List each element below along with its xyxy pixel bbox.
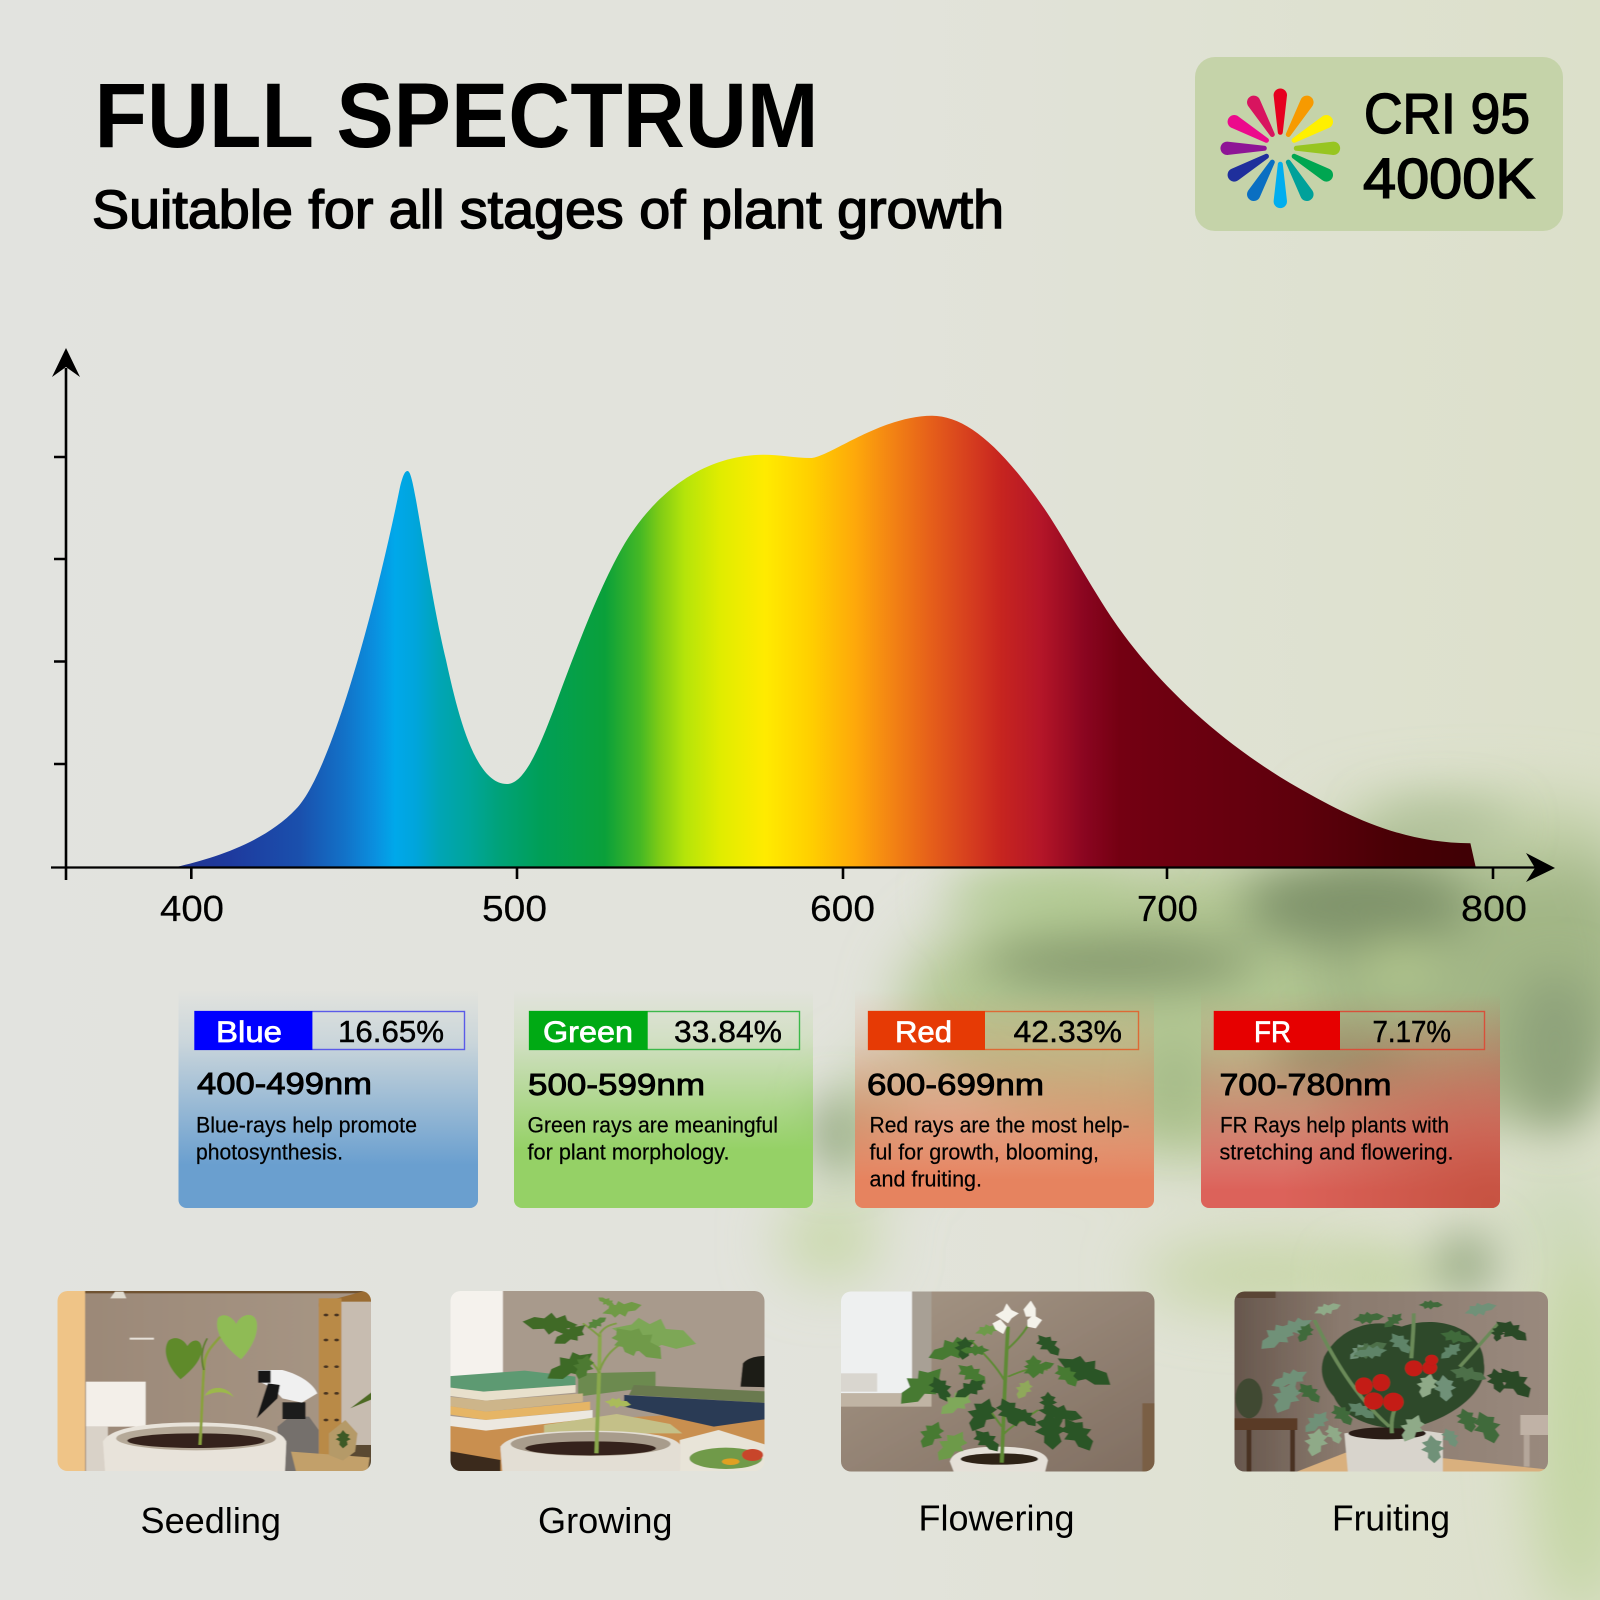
- x axis labels: 700: [1137, 888, 1198, 929]
- x axis labels: 500: [482, 888, 547, 929]
- panel: blue band: [178, 985, 478, 1208]
- icon: colour wheel: [1220, 88, 1340, 208]
- title: FULL SPECTRUM: [94, 65, 818, 167]
- y axis with arrow: [52, 348, 80, 880]
- label: seedling: Seedling: [140, 1500, 281, 1541]
- panel: far red band: stretching and flowering.: [1220, 1140, 1454, 1164]
- CRI value: CRI 95: [1364, 82, 1530, 146]
- badge: CRI 95 4000K: [1195, 57, 1563, 231]
- panel: green band: 500-599nm: [528, 1067, 705, 1102]
- panel: red band: Red: [895, 1016, 952, 1049]
- panel: blue band: 16.65%: [338, 1014, 444, 1049]
- x axis labels: [160, 888, 1527, 929]
- x axis labels: 600: [810, 888, 875, 929]
- panel: blue band: Blue-rays help promote: [196, 1112, 417, 1138]
- photo: seedling: [50, 1287, 379, 1477]
- spectrum curve: [176, 416, 1476, 867]
- panel: far red band: [1201, 985, 1500, 1208]
- panel: red band: 600-699nm: [867, 1067, 1044, 1102]
- photo: flowering: [832, 1287, 1162, 1477]
- panel: green band: Green: [543, 1016, 633, 1049]
- photo: fruiting: [1234, 1292, 1548, 1472]
- panel: red band: 42.33%: [1014, 1014, 1122, 1049]
- panel: green band: for plant morphology.: [528, 1140, 730, 1164]
- panel: green band: Green rays are meaningful: [528, 1112, 778, 1138]
- panel: blue band: photosynthesis.: [196, 1140, 343, 1164]
- panel: far red band: 700-780nm: [1220, 1067, 1392, 1102]
- panel: blue band: 400-499nm: [197, 1066, 372, 1101]
- x axis labels: 400: [160, 888, 224, 929]
- x axis with arrow: [51, 853, 1555, 882]
- panel: blue band: Blue: [216, 1016, 282, 1049]
- subtitle: Suitable for all stages of plant growth: [92, 180, 1004, 240]
- photo: growing: [442, 1287, 772, 1477]
- panel: red band: Red rays are the most help-: [870, 1112, 1130, 1138]
- label: flowering: Flowering: [918, 1498, 1074, 1538]
- label: fruiting: Fruiting: [1332, 1498, 1450, 1538]
- label: growing: Growing: [538, 1500, 672, 1541]
- panel: red band: [855, 985, 1154, 1208]
- panel: far red band: FR Rays help plants with: [1220, 1112, 1449, 1138]
- panel: green band: [514, 985, 813, 1208]
- panel: far red band: 7.17%: [1372, 1014, 1451, 1049]
- panel: red band: ful for growth, blooming,: [870, 1140, 1099, 1164]
- colour temperature: 4000K: [1363, 147, 1535, 211]
- chart: spectral power distribution: [51, 348, 1555, 929]
- panel: green band: 33.84%: [674, 1014, 782, 1049]
- x axis labels: 800: [1461, 888, 1527, 929]
- panel: far red band: FR: [1254, 1016, 1291, 1049]
- panel: red band: and fruiting.: [870, 1166, 982, 1192]
